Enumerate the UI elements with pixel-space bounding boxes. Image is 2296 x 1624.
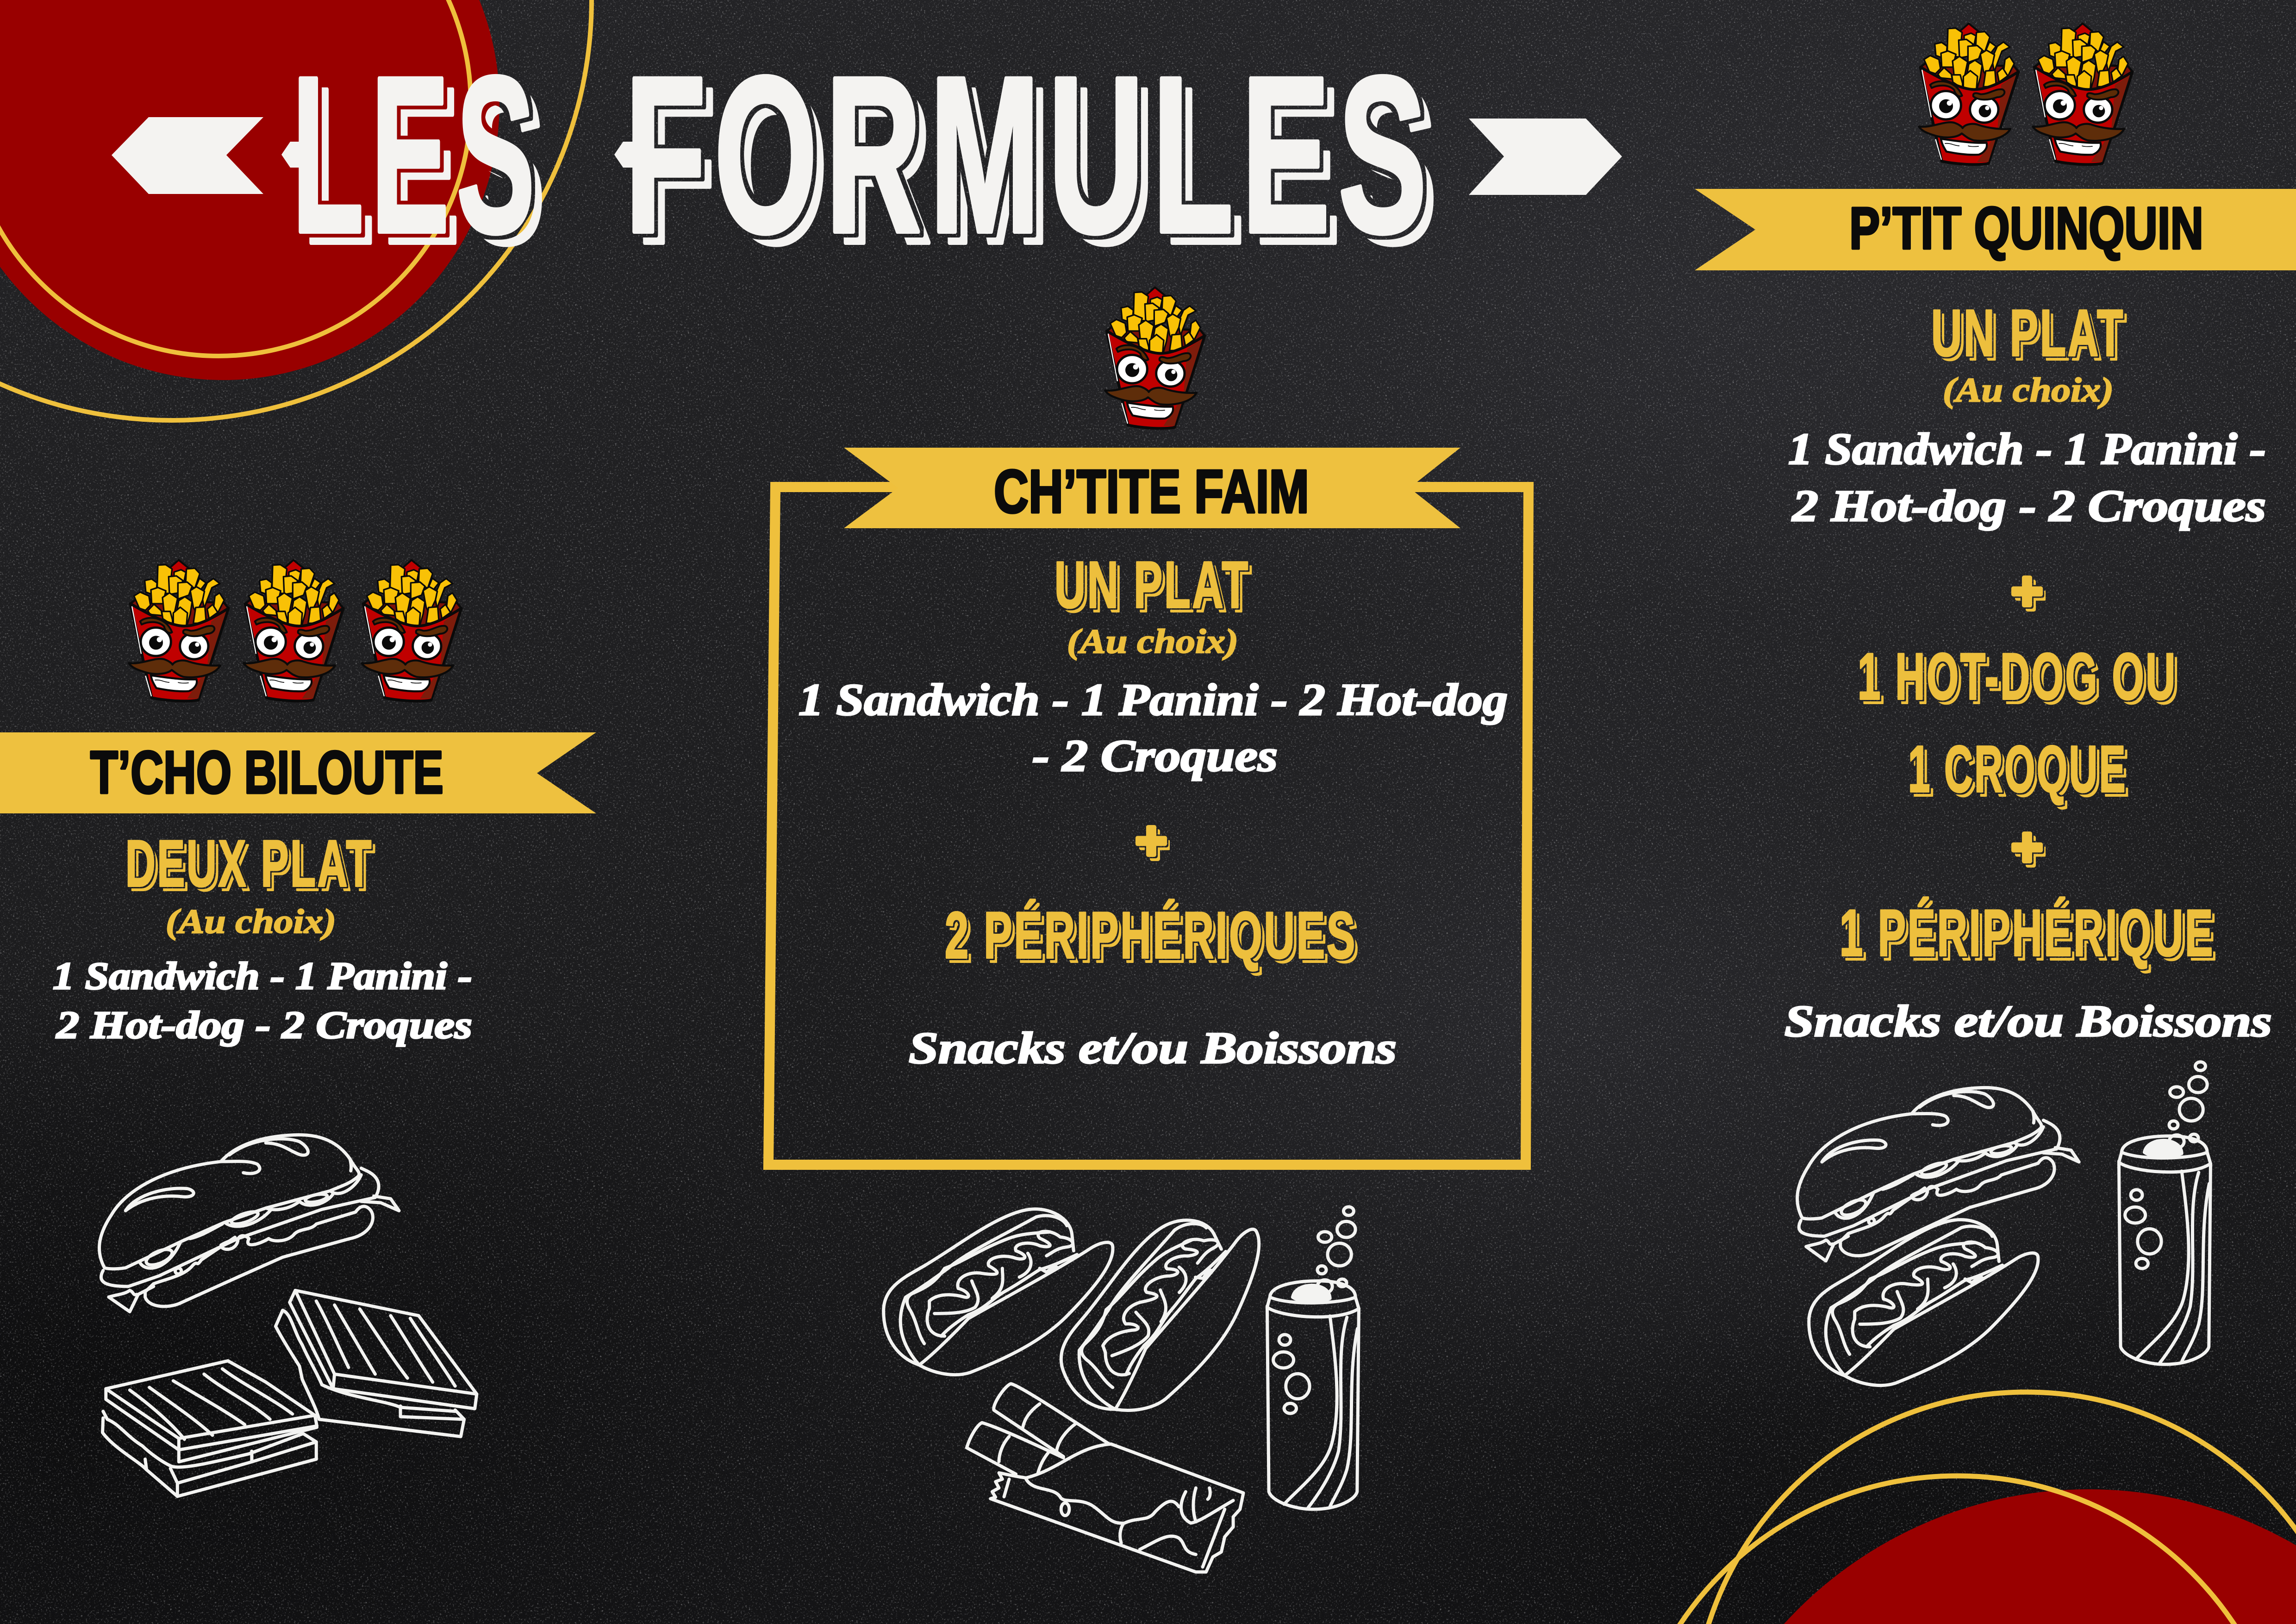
decoration: top-left inner yellow ring [0,0,471,356]
illustration: sandwich [1797,1087,2079,1261]
icon: one fries mascot [1105,287,1205,428]
text: au choix: (Au choix) [1943,371,2114,409]
text: plus sign: + [2011,817,2043,878]
icon: two fries mascots [1919,24,2133,164]
title: LES [292,30,542,279]
heading: T'cho Biloute: T’CHO BILOUTE [90,738,443,806]
text: plus sign: + [1136,810,1167,871]
text: au choix: (Au choix) [1067,623,1238,661]
title: FORMULES [625,30,1435,279]
heading: P'tit Quinquin: P’TIT QUINQUIN [1849,195,2203,262]
text: choices list: 2 Hot-dog - 2 Croques [1791,481,2266,531]
banner: right ribbon [1695,189,2296,270]
illustration: panini upper [275,1290,477,1437]
text: choices list [53,955,472,1047]
text: choices list: 2 Hot-dog - 2 Croques [56,1004,472,1047]
arrow: title left [112,117,263,194]
heading: 1 croque: 1 CROQUE [1908,732,2127,806]
text: choices list [1788,424,2266,531]
text: plus sign: + [2011,561,2043,622]
text: choices list: 1 Sandwich - 1 Panini - 2 Hot-dog [799,675,1508,725]
heading: Ch'tite Faim: CH’TITE FAIM [994,457,1309,525]
panel: P'tit Quinquin (right) [1695,24,2296,1386]
text: choices list [799,675,1508,781]
arrow: title right [1469,119,1622,195]
text: choices list: - 2 Croques [1032,731,1278,781]
heading: 2 périphériques: 2 PÉRIPHÉRIQUES [945,899,1357,972]
decoration: top-left red circle [0,0,499,380]
decoration: bottom-right inner yellow ring [1624,1476,2290,1624]
decoration: bottom-right outer yellow ring [1693,1392,2296,1624]
text: au choix: (Au choix) [166,903,336,941]
text: snacks and drinks: Snacks et/ou Boissons [1784,996,2272,1046]
heading: Deux plat: DEUX PLAT [125,827,373,900]
illustration: hot-dog two [1029,1197,1300,1430]
decoration: bottom-right red circle [1677,1489,2296,1624]
illustration: soda can [2119,1062,2210,1364]
panel: Ch'tite Faim (centre) [768,287,1529,1572]
illustration: hot-dog one [884,1209,1113,1375]
title [281,30,1435,279]
heading: Un plat: UN PLAT [1054,548,1250,622]
text: choices list: 1 Sandwich - 1 Panini - [1788,424,2266,474]
panel: T'cho Biloute (left) [0,560,596,1496]
frame: yellow box [768,487,1529,1165]
icon: three fries mascots [129,560,462,701]
illustration: sandwich [100,1135,399,1312]
illustration: panini lower [103,1361,317,1496]
banner: double-ended ribbon [844,448,1460,528]
illustration: soda can [1267,1207,1359,1509]
illustration: snack bar [967,1384,1243,1572]
heading: Un plat: UN PLAT [1931,296,2125,370]
decoration: top-left outer yellow ring [0,0,592,420]
banner: left ribbon [0,732,596,813]
text: choices list: 1 Sandwich - 1 Panini - [53,955,472,998]
text: snacks and drinks: Snacks et/ou Boissons [909,1023,1397,1073]
illustration: hot-dog [1809,1220,2038,1386]
